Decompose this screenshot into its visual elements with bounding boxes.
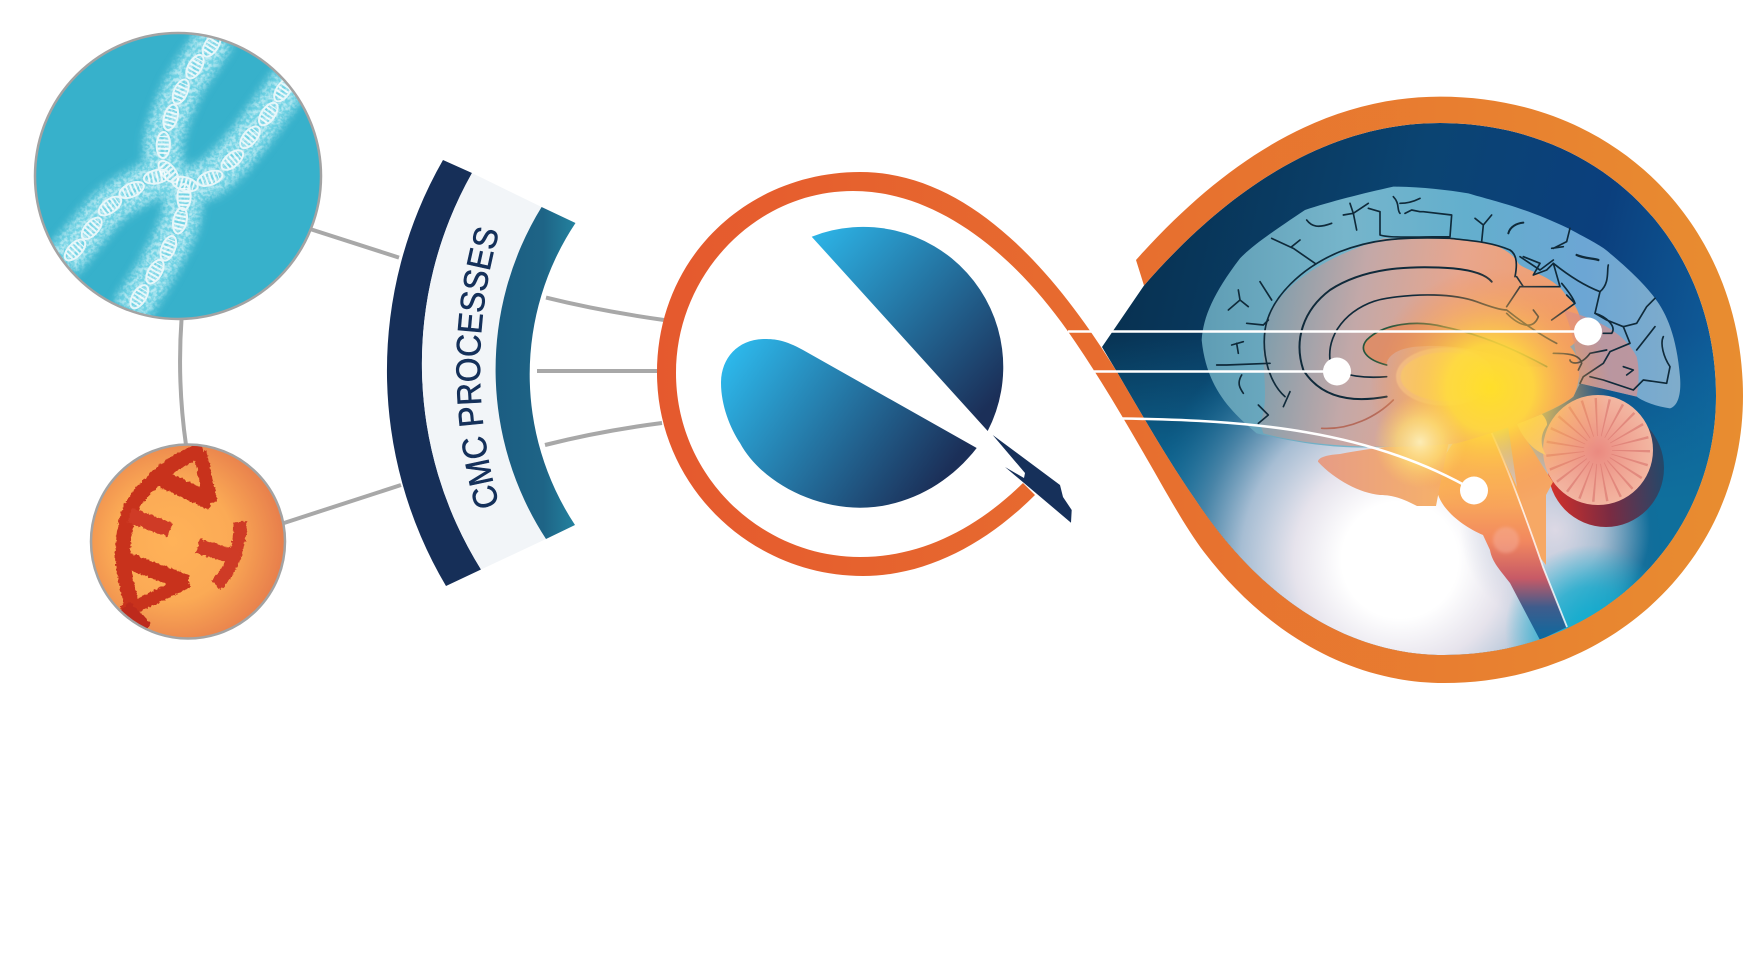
icon: cerebrum xyxy=(1202,187,1680,448)
right cortex warm shade xyxy=(1563,310,1639,397)
icon: temporal lobe xyxy=(1318,444,1448,506)
chromosome glow bands xyxy=(62,36,295,312)
navy outer arc xyxy=(387,160,481,586)
light centre arc xyxy=(422,173,546,570)
cerebrum outline xyxy=(1202,187,1680,448)
band label: CMC PROCESSES xyxy=(456,228,498,508)
cingulate band xyxy=(1364,324,1464,364)
thalamus xyxy=(1396,348,1452,403)
logo: upper segment xyxy=(812,227,1003,431)
logo: lower segment xyxy=(721,339,977,508)
callout: upper cortex xyxy=(1068,318,1602,346)
image background xyxy=(1090,110,1730,670)
teal inner arc xyxy=(496,207,576,539)
callouts: white pointer lines and dots xyxy=(1068,318,1602,504)
inner brain xyxy=(1260,238,1581,447)
curved band: CMC processes xyxy=(386,160,576,586)
circle: chromosome DNA on teal xyxy=(35,30,321,319)
logo: dart tail xyxy=(993,435,1072,523)
glow: yellow core xyxy=(1370,268,1610,508)
icon: brain stem xyxy=(1436,400,1567,640)
circle: red DNA on orange xyxy=(91,444,285,638)
callout: brain stem xyxy=(1120,418,1488,504)
logo mark xyxy=(721,227,1072,523)
callout: mid brain xyxy=(1094,358,1351,386)
connector lines xyxy=(180,229,664,523)
brain image in teardrop xyxy=(1090,110,1730,670)
infinity ribbon xyxy=(657,97,1743,683)
icon: cerebellum xyxy=(1543,395,1664,527)
DNA helix loops xyxy=(61,30,296,311)
sulci xyxy=(1217,197,1670,428)
